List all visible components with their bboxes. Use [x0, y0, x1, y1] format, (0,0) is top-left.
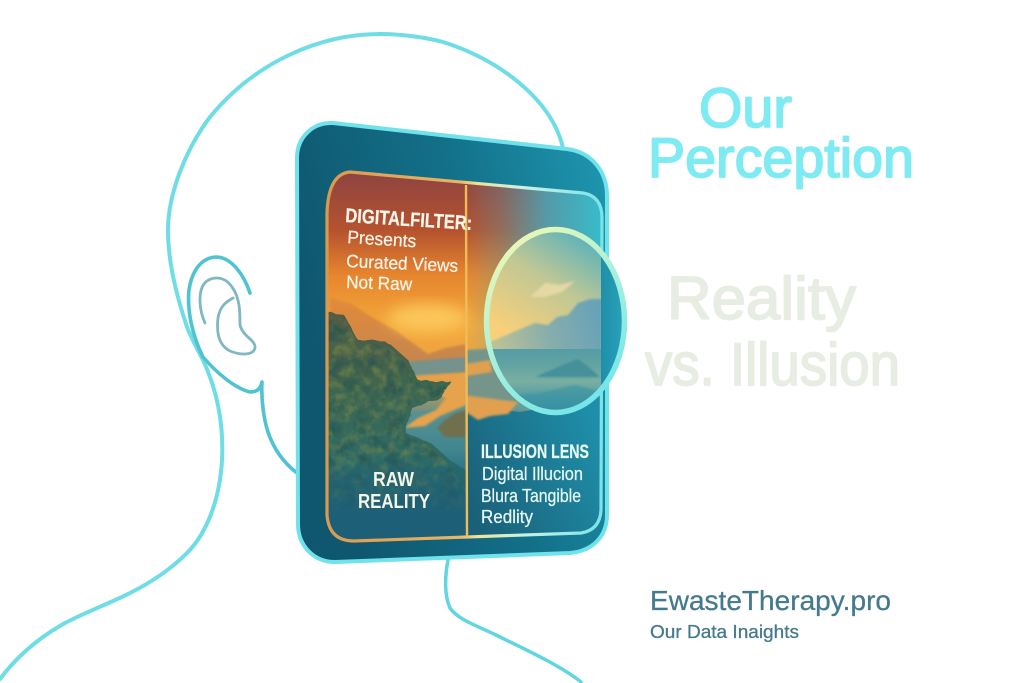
- reality label: REALITY: [358, 490, 430, 513]
- digital filter heading: DIGITALFILTER:: [345, 205, 473, 235]
- text: digital filter: [345, 205, 473, 294]
- title: our perception: [648, 76, 914, 189]
- ear: [189, 257, 297, 473]
- head silhouette outline: [0, 34, 563, 679]
- right water strips: [464, 348, 516, 400]
- forest foliage shadows: [328, 316, 454, 498]
- brand block: [650, 585, 891, 642]
- neck front line: [446, 560, 581, 682]
- subtitle line 1: Reality: [667, 265, 856, 332]
- lens lower shore: [520, 384, 596, 400]
- center divider: [466, 185, 467, 537]
- illusion line 1: Digital Illucion: [482, 463, 583, 484]
- text: illusion lens: [481, 442, 589, 527]
- sky glow: [388, 304, 468, 332]
- outer ear and jaw line: [189, 257, 297, 473]
- lens island: [535, 359, 600, 377]
- digital filter line 3: Not Raw: [346, 272, 413, 294]
- illusion line 3: Redlity: [481, 506, 534, 527]
- brand tagline: Our Data Inaights: [650, 621, 799, 642]
- right lower teal field: [468, 396, 600, 534]
- title line 2: Perception: [648, 126, 914, 189]
- inner landscape panel: [324, 170, 605, 545]
- lens water: [492, 349, 601, 410]
- left sky: [328, 174, 582, 497]
- left water: [410, 405, 466, 418]
- lens mountain: [490, 299, 602, 352]
- illusion line 2: Blura Tangible: [481, 485, 581, 506]
- card body: [297, 123, 607, 562]
- lens cloud: [530, 281, 575, 297]
- far water band: [405, 357, 466, 376]
- lens sky: [489, 232, 601, 414]
- orange reflections: [466, 360, 518, 420]
- forest mass: [328, 312, 466, 494]
- raw label: RAW: [373, 468, 415, 491]
- digital filter line 2: Curated Views: [346, 251, 459, 276]
- lens rim section outside panel: [601, 256, 622, 386]
- subtitle line 2: vs. Illusion: [645, 331, 900, 398]
- brand name: EwasteTherapy.pro: [650, 585, 891, 616]
- illusion lens: [484, 227, 629, 420]
- subtitle: reality vs. illusion: [645, 265, 900, 398]
- river: [404, 372, 466, 428]
- lens scene: [489, 232, 622, 414]
- panel: device card: [297, 123, 607, 562]
- illusion lens heading: ILLUSION LENS: [481, 442, 589, 463]
- distant hills: [330, 299, 466, 362]
- right sky tint: [471, 185, 600, 410]
- digital filter line 1: Presents: [347, 227, 417, 251]
- island: [437, 410, 466, 437]
- title line 1: Our: [699, 76, 792, 139]
- lens ring: [486, 230, 624, 412]
- inner ear fold: [200, 278, 255, 354]
- forest foliage highlights: [324, 314, 466, 510]
- bottom fade: [328, 460, 466, 510]
- panel border: [327, 172, 602, 541]
- text: raw reality: [358, 468, 430, 513]
